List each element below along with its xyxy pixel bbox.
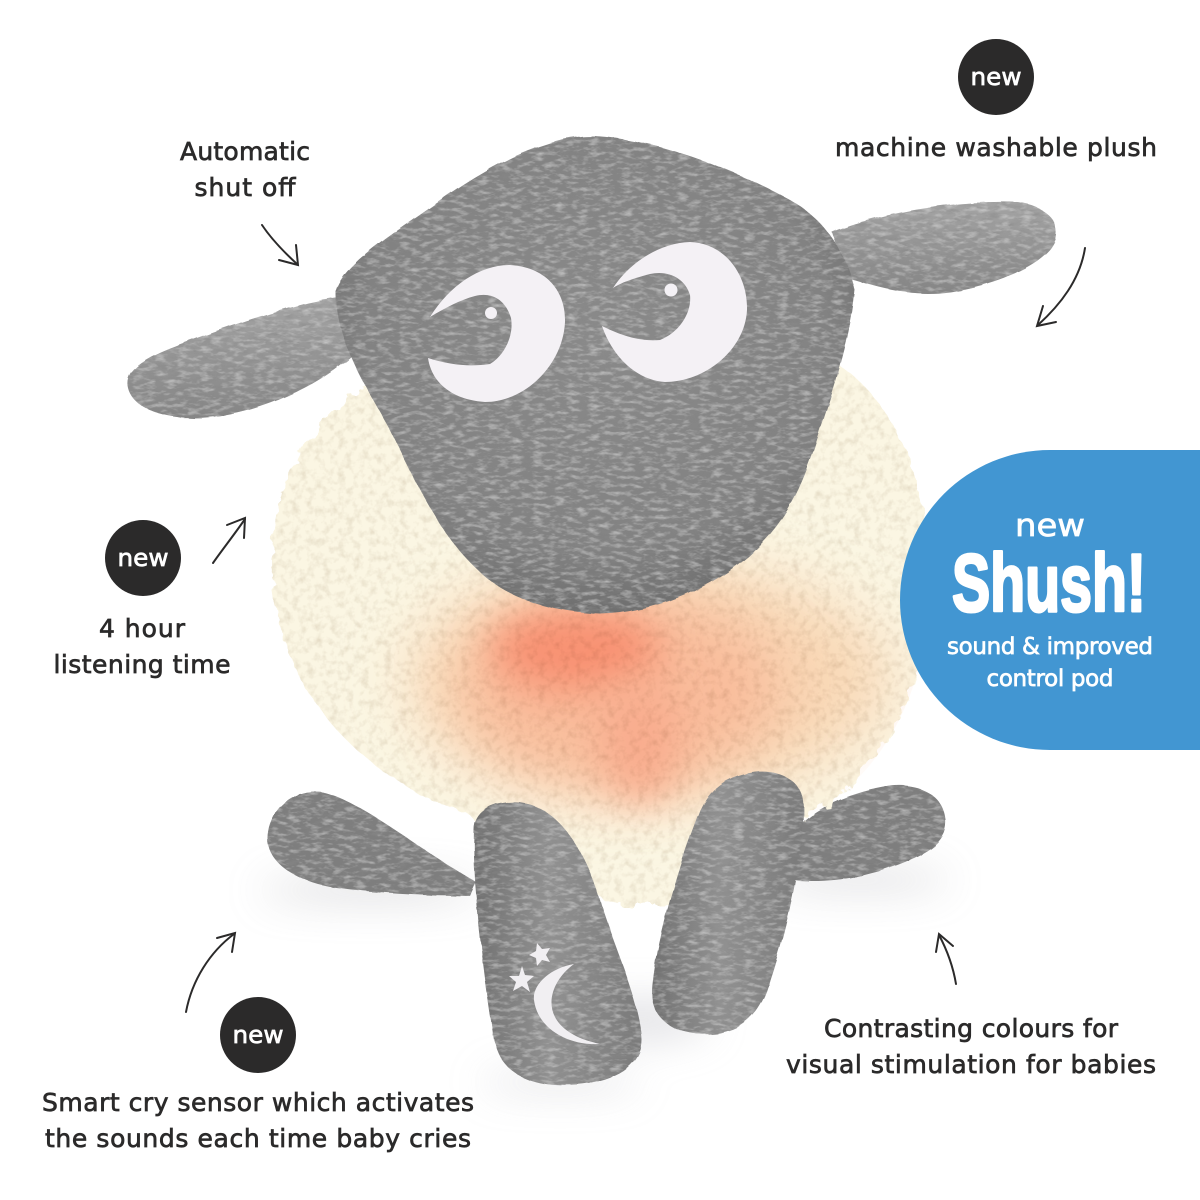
arrow: to foot bbox=[936, 934, 956, 984]
label: contrasting colours bbox=[786, 1014, 1156, 1079]
badge: new (left) bbox=[105, 520, 181, 596]
arrow: to head bbox=[262, 225, 298, 265]
badge: new (left): new bbox=[118, 544, 168, 572]
label: 4 hour listening time bbox=[54, 614, 230, 679]
panel text bbox=[947, 634, 1153, 692]
label: automatic shut off: shut off bbox=[194, 173, 296, 202]
left eye bbox=[428, 265, 565, 402]
badge: new (bottom): new bbox=[232, 1021, 284, 1049]
back foot right bbox=[794, 785, 946, 881]
label: 4 hour listening time: 4 hour bbox=[99, 614, 186, 643]
panel: new Shush bbox=[900, 450, 1200, 750]
front leg left bbox=[474, 802, 642, 1085]
badge: new (bottom) bbox=[220, 997, 296, 1073]
label: smart cry sensor: Smart cry sensor which activates bbox=[42, 1088, 474, 1117]
label: smart cry sensor: the sounds each time baby cries bbox=[45, 1124, 471, 1153]
coral night light glow bbox=[410, 565, 890, 800]
arrow: to leg bbox=[186, 933, 235, 1012]
moon and stars embroidery bbox=[509, 943, 600, 1044]
label: contrasting colours: Contrasting colours for bbox=[824, 1014, 1119, 1043]
sheep plush toy bbox=[127, 136, 1057, 1085]
front leg right bbox=[652, 771, 803, 1034]
right ear bbox=[832, 202, 1057, 293]
head bbox=[336, 136, 855, 614]
arrow: to body bbox=[213, 518, 245, 563]
left ear bbox=[127, 298, 352, 418]
panel text: control pod bbox=[986, 666, 1114, 692]
panel label: new: new bbox=[1015, 508, 1085, 544]
label: 4 hour listening time: listening time bbox=[54, 650, 230, 679]
badge: new (top right) bbox=[958, 39, 1034, 115]
label: machine washable plush: machine washable plush bbox=[835, 133, 1157, 162]
floor shadow bbox=[260, 871, 950, 1090]
label: automatic shut off bbox=[180, 137, 310, 202]
back foot left bbox=[267, 791, 476, 896]
badge: new (top right): new bbox=[970, 63, 1022, 91]
label: automatic shut off: Automatic bbox=[180, 137, 310, 166]
label: contrasting colours: visual stimulation for babies bbox=[786, 1050, 1156, 1079]
arrow: to ear bbox=[1037, 248, 1085, 326]
right eye bbox=[602, 242, 747, 382]
label: smart cry sensor bbox=[42, 1088, 474, 1153]
panel text: sound & improved bbox=[947, 634, 1153, 660]
woolly body bbox=[272, 355, 930, 905]
